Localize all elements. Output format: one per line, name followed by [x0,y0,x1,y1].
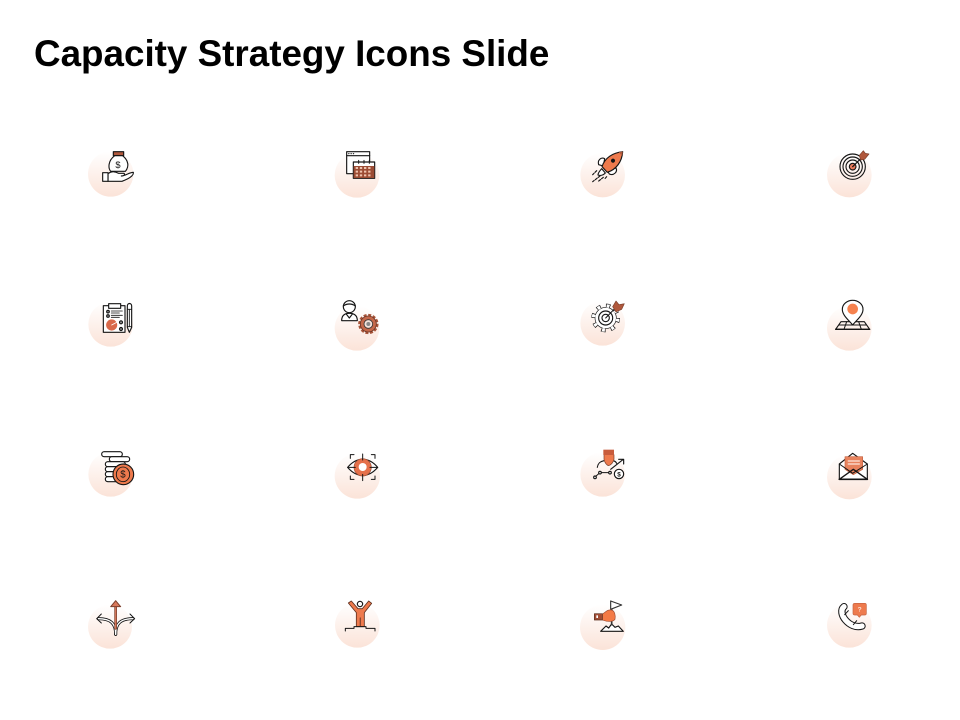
icon: person with gear [335,301,379,351]
icon: phone with question bubble: ? [858,607,862,614]
icon: coin stack with dollar: $ [120,470,126,481]
icon: person with growth path and coin: $ [617,471,621,478]
icon: money bag on hand: $ [115,160,121,170]
icon: eye with crosshair [335,453,380,499]
icon: calendar window [335,152,379,198]
icon: phone with question bubble [827,603,872,648]
icon: open envelope with letter [827,453,872,499]
icon: clipboard report and pen [88,302,133,347]
title: Capacity Strategy Icons Slide [34,33,549,74]
icon: coin stack with dollar [88,452,134,497]
icon: target with arrow [827,151,872,197]
icon: gear with target arrow [580,301,625,346]
icon: three way direction arrows [88,601,135,649]
icon: money bag on hand [88,151,133,197]
icon: person with raised arms on podium [335,601,380,648]
icon: person with growth path and coin [580,450,625,497]
icon: rocket [580,152,625,197]
icon: fist holding flag on mountain [580,601,625,650]
icon: map location pin [827,300,872,351]
